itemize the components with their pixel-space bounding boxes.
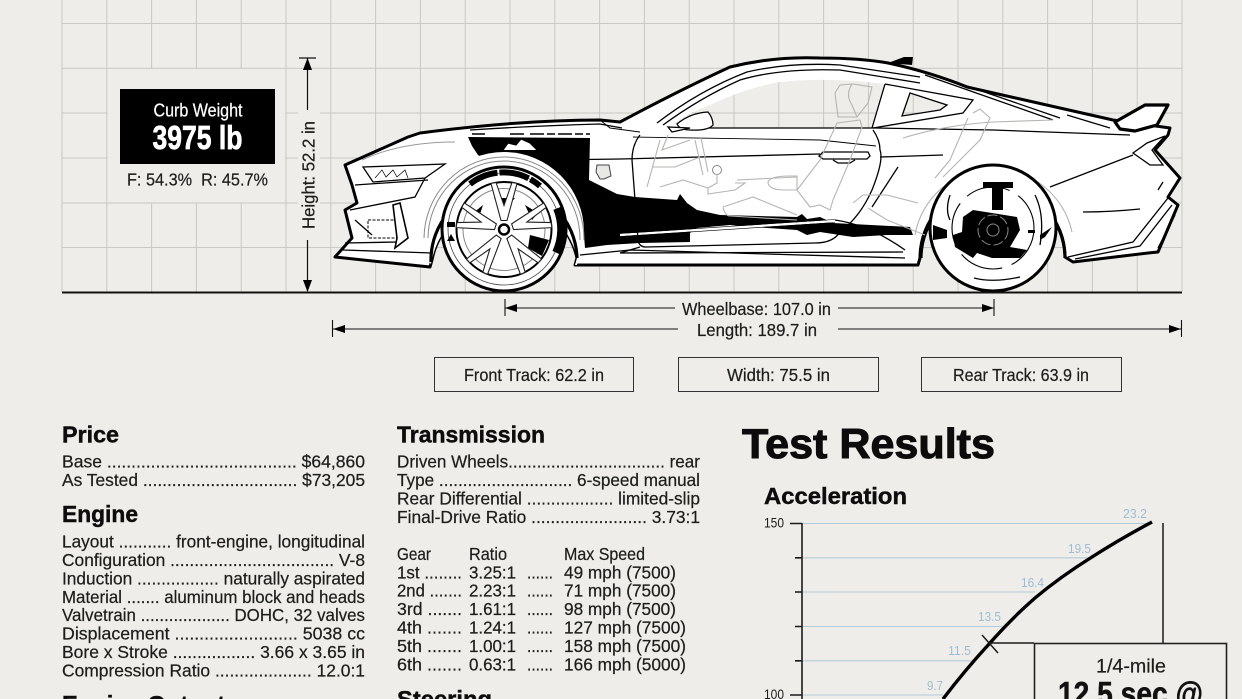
panel: engine: Engine bbox=[62, 501, 138, 527]
dimension: wheelbase: Wheelbase: 107.0 in bbox=[682, 299, 831, 319]
chart: acceleration: 150 bbox=[764, 514, 784, 530]
panel: transmission bbox=[397, 422, 700, 527]
roof fin bbox=[888, 57, 913, 65]
panel: engine: Bore x Stroke ................. 3.66 x 3.65 in bbox=[62, 642, 365, 662]
table: gear ratios: ...... bbox=[527, 618, 553, 638]
panel: price: As Tested ................................ $73,205 bbox=[62, 470, 365, 490]
rear spoiler bbox=[1115, 105, 1168, 131]
front wheel arch bbox=[430, 152, 584, 265]
table: gear ratios: 158 mph (7500) bbox=[564, 636, 686, 656]
chart: acceleration: 13.5 bbox=[978, 610, 1001, 624]
table: gear ratios: Ratio bbox=[469, 544, 507, 564]
table: gear ratios: 3rd ....... bbox=[397, 599, 462, 619]
dimension: height bbox=[298, 58, 318, 292]
box: width bbox=[678, 358, 878, 392]
dimension: wheelbase bbox=[505, 299, 994, 319]
panel: price: Base ....................................... $64,860 bbox=[62, 452, 365, 472]
panel: transmission: Final-Drive Ratio ........................ 3.73:1 bbox=[397, 507, 700, 527]
car illustration bbox=[334, 56, 1182, 292]
panel: engine: Material ....... aluminum block and heads bbox=[62, 587, 365, 607]
chart: acceleration: 19.5 bbox=[1068, 542, 1091, 556]
table: gear ratios: 5th ....... bbox=[397, 636, 462, 656]
table: gear ratios: ...... bbox=[527, 599, 553, 619]
table: gear ratios: 6th ....... bbox=[397, 654, 462, 674]
callout: curb weight bbox=[120, 89, 275, 190]
table: gear ratios: 1st ........ bbox=[397, 562, 462, 582]
table: gear ratios: 1.00:1 bbox=[469, 636, 516, 656]
rear wheel bbox=[915, 165, 1072, 291]
panel: price bbox=[62, 422, 365, 490]
panel: price: Price bbox=[62, 422, 119, 448]
table: gear ratios: 1.61:1 bbox=[469, 599, 516, 619]
panel: engine: Layout ........... front-engine, longitudinal bbox=[62, 532, 365, 552]
door logo bbox=[596, 165, 611, 179]
panel: engine: Displacement ......................... 5038 cc bbox=[62, 624, 365, 644]
panel: transmission: Transmission bbox=[397, 422, 545, 448]
table: gear ratios: Gear bbox=[397, 544, 431, 564]
table: gear ratios: 127 mph (7500) bbox=[564, 618, 686, 638]
table: gear ratios: 2.23:1 bbox=[469, 581, 516, 601]
interior seat and controls bbox=[647, 84, 1053, 235]
table: gear ratios: ...... bbox=[527, 654, 553, 674]
table: gear ratios: ...... bbox=[527, 636, 553, 656]
box: front track bbox=[434, 358, 634, 392]
box: width: Width: 75.5 in bbox=[727, 365, 830, 385]
box: front track: Front Track: 62.2 in bbox=[464, 365, 604, 385]
box: rear track: Rear Track: 63.9 in bbox=[953, 365, 1089, 385]
panel: transmission: Driven Wheels................................. rear bbox=[397, 452, 700, 472]
front wheel bbox=[442, 167, 566, 291]
chart: acceleration: 16.4 bbox=[1021, 576, 1044, 590]
dimension: height: Height: 52.2 in bbox=[298, 121, 318, 229]
ground line bbox=[62, 292, 1182, 294]
chart: acceleration: 23.2 bbox=[1123, 507, 1147, 521]
table: gear ratios: Max Speed bbox=[564, 544, 645, 564]
chart: acceleration: 9.7 bbox=[927, 679, 943, 693]
table: gear ratios: 98 mph (7500) bbox=[564, 599, 676, 619]
table: gear ratios: 0.63:1 bbox=[469, 654, 516, 674]
callout: curb weight: F: 54.3% R: 45.7% bbox=[127, 170, 268, 190]
drivetrain silhouette bbox=[468, 137, 913, 248]
table: gear ratios: ...... bbox=[527, 581, 553, 601]
panel: engine bbox=[62, 501, 365, 680]
table: gear ratios: 166 mph (5000) bbox=[564, 654, 686, 674]
table: gear ratios: 71 mph (7500) bbox=[564, 581, 676, 601]
table: gear ratios: 4th ....... bbox=[397, 618, 462, 638]
panel: transmission: Rear Differential .................. limited-slip bbox=[397, 488, 700, 508]
heading: acceleration: Acceleration bbox=[764, 483, 907, 509]
table: gear ratios: 1.24:1 bbox=[469, 618, 516, 638]
heading: test results: Test Results bbox=[742, 420, 995, 467]
callout: curb weight: Curb Weight bbox=[154, 100, 242, 120]
panel: transmission: Type ............................ 6-speed manual bbox=[397, 470, 700, 490]
callout: curb weight: 3975 lb bbox=[152, 119, 242, 156]
table: gear ratios bbox=[397, 544, 686, 674]
panel: engine: Valvetrain ................... DOHC, 32 valves bbox=[62, 605, 365, 625]
side windows showing grid through glass bbox=[674, 80, 946, 128]
callout: quarter mile bbox=[1034, 644, 1226, 699]
car body bbox=[335, 58, 1180, 267]
table: gear ratios: ...... bbox=[527, 562, 553, 582]
chart: acceleration bbox=[764, 507, 1163, 699]
panel: engine: Compression Ratio .................... 12.0:1 bbox=[62, 660, 365, 680]
box: rear track bbox=[922, 358, 1122, 392]
chart: acceleration: 11.5 bbox=[948, 644, 971, 658]
windows and body lines bbox=[343, 64, 1175, 259]
dimension: length bbox=[332, 320, 1182, 340]
table: gear ratios: 2nd ....... bbox=[397, 581, 462, 601]
callout: quarter mile: 1/4-mile bbox=[1096, 656, 1166, 678]
panel: engine: Induction ................. naturally aspirated bbox=[62, 568, 365, 588]
panel: engine: Configuration .................................. V-8 bbox=[62, 550, 365, 570]
dimension: length: Length: 189.7 in bbox=[697, 320, 817, 340]
table: gear ratios: 49 mph (7500) bbox=[564, 562, 676, 582]
table: gear ratios: 3.25:1 bbox=[469, 562, 516, 582]
